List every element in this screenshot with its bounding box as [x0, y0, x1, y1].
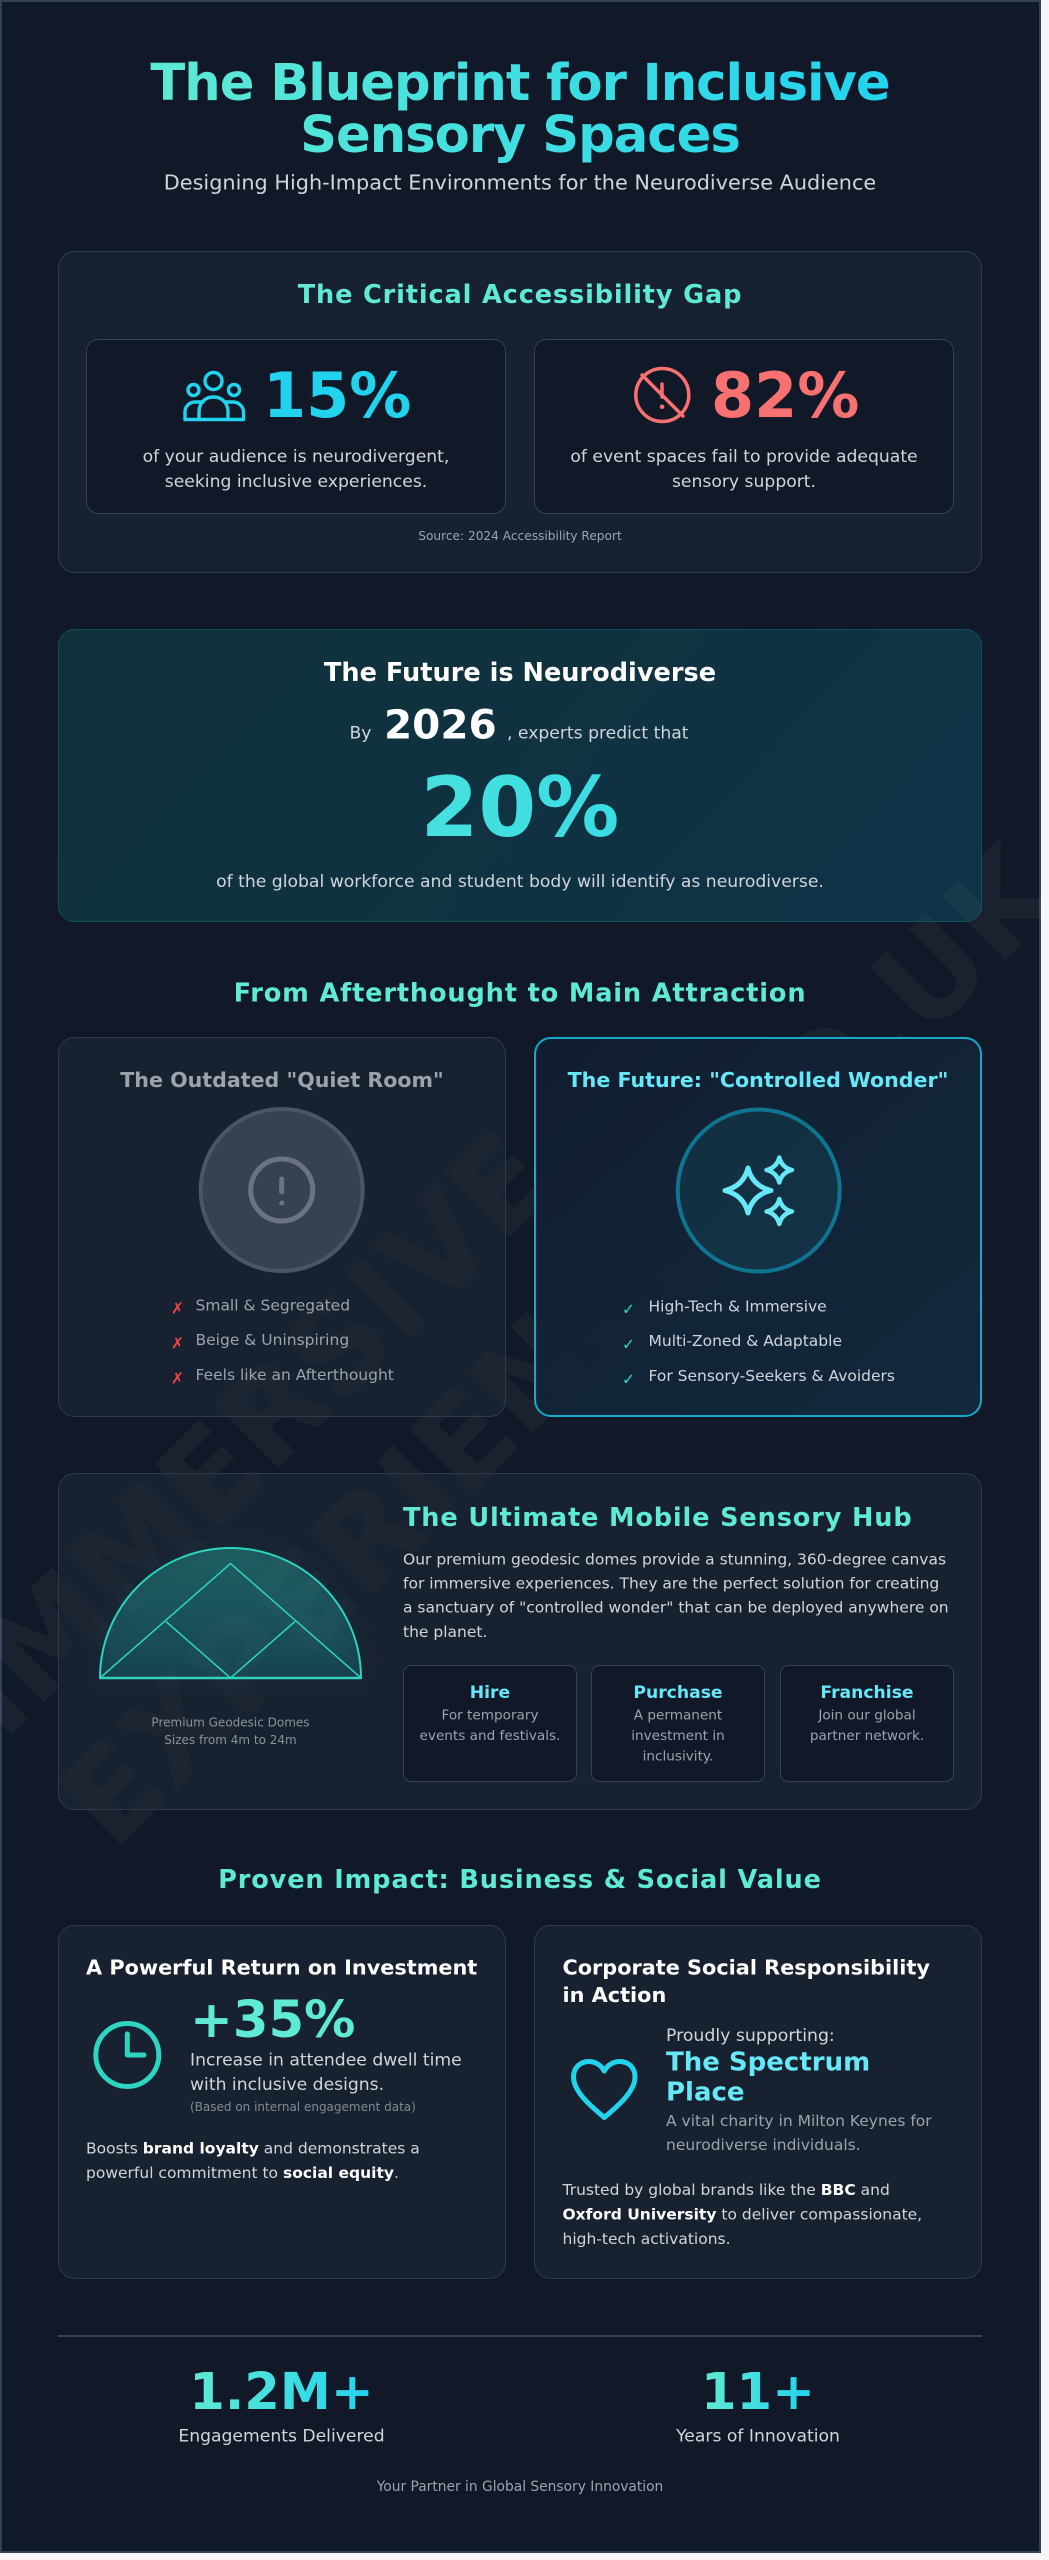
- stat: 15%: 15%: [263, 359, 411, 432]
- heading: The Future: "Controlled Wonder": [568, 1068, 948, 1092]
- card: purchase: Purchase: [633, 1683, 723, 1703]
- card: hire: Hire: [470, 1683, 510, 1703]
- panel: return on investment: [58, 1926, 506, 2278]
- body text: Boosts brand loyalty and demonstrates a: [86, 2140, 420, 2158]
- heading: The Ultimate Mobile Sensory Hub: [403, 1503, 912, 1533]
- heading: The Future is Neurodiverse: [324, 658, 716, 688]
- list: benefits: [622, 1298, 895, 1388]
- icon: heart: [574, 2062, 635, 2118]
- list: drawbacks: ✗: [171, 1370, 184, 1388]
- charity text: Place: [666, 2078, 745, 2108]
- card: purchase: [592, 1666, 764, 1782]
- stat note: (Based on internal engagement data): [190, 2100, 416, 2114]
- list: drawbacks: [171, 1296, 394, 1388]
- card: purchase: inclusivity.: [643, 1748, 713, 1764]
- list: drawbacks: Beige & Uninspiring: [196, 1331, 349, 1349]
- description: [570, 447, 918, 492]
- body text: a sanctuary of "controlled wonder" that can be deployed anywhere on: [403, 1598, 949, 1616]
- stat: engagements delivered: [178, 2362, 385, 2446]
- section heading: afterthought: From Afterthought to Main Attraction: [234, 978, 806, 1008]
- stat description: [190, 2050, 462, 2095]
- icon: no support: [636, 368, 689, 422]
- icon: clock: [96, 2024, 159, 2086]
- card: hire: events and festivals.: [420, 1728, 560, 1744]
- panel: corporate social responsibility: [534, 1926, 982, 2278]
- body text: for immersive experiences. They are the perfect solution for creating: [403, 1574, 939, 1592]
- icon: sparkles: [678, 1110, 840, 1272]
- list: benefits: ✓: [622, 1336, 635, 1354]
- prediction line: 2026: [384, 700, 497, 748]
- card: hire: For temporary: [442, 1708, 538, 1724]
- heading: Corporate Social Responsibility: [562, 1956, 930, 1980]
- caption: dome: Sizes from 4m to 24m: [164, 1733, 297, 1747]
- list: benefits: ✓: [622, 1300, 635, 1318]
- panel: future is neurodiverse: [58, 630, 982, 922]
- heading: [562, 1956, 930, 2007]
- body text: the planet.: [403, 1623, 487, 1641]
- body text: [403, 1550, 949, 1641]
- card: 82 percent: [534, 340, 954, 514]
- heading: A Powerful Return on Investment: [86, 1956, 477, 1980]
- heading: The Outdated "Quiet Room": [120, 1068, 444, 1092]
- source: Source: 2024 Accessibility Report: [418, 529, 622, 543]
- card: purchase: investment in: [631, 1728, 725, 1744]
- stat: years of innovation: Years of Innovation: [675, 2426, 840, 2446]
- body text: [562, 2181, 922, 2248]
- description: seeking inclusive experiences.: [165, 472, 427, 492]
- card: franchise: partner network.: [810, 1728, 924, 1744]
- prediction line: [350, 700, 689, 748]
- stat: engagements delivered: 1.2M+: [189, 2362, 374, 2422]
- list: benefits: High-Tech & Immersive: [648, 1298, 827, 1316]
- panel: controlled wonder: [535, 1038, 981, 1416]
- stat description: with inclusive designs.: [190, 2075, 384, 2095]
- title: [150, 53, 890, 165]
- footer: Your Partner in Global Sensory Innovation: [376, 2479, 663, 2495]
- list: benefits: ✓: [622, 1370, 635, 1388]
- card: franchise: [780, 1666, 954, 1782]
- title: The Blueprint for Inclusive: [150, 53, 890, 113]
- caption: dome: [151, 1716, 310, 1747]
- body text: high-tech activations.: [562, 2230, 731, 2248]
- illustration: geodesic dome: [100, 1548, 361, 1678]
- charity text: Proudly supporting:: [666, 2026, 835, 2046]
- panel: accessibility gap: [58, 252, 982, 572]
- body text: powerful commitment to social equity.: [86, 2164, 399, 2182]
- stat: +35%: +35%: [190, 1990, 355, 2050]
- icon: group of people: [185, 372, 244, 420]
- charity text: A vital charity in Milton Keynes for: [666, 2112, 932, 2130]
- stat description: Increase in attendee dwell time: [190, 2050, 462, 2070]
- heading: accessibility gap: The Critical Accessibility Gap: [298, 280, 742, 310]
- stat: 82%: 82%: [711, 359, 859, 432]
- description: sensory support.: [672, 472, 816, 492]
- list: drawbacks: ✗: [171, 1334, 184, 1352]
- charity text: neurodiverse individuals.: [666, 2136, 861, 2154]
- stat: engagements delivered: Engagements Delivered: [178, 2426, 385, 2446]
- charity text: The Spectrum: [666, 2048, 870, 2078]
- subtitle: Designing High-Impact Environments for the Neurodiverse Audience: [164, 170, 876, 194]
- body text: [86, 2140, 420, 2182]
- list: drawbacks: Small & Segregated: [196, 1296, 350, 1314]
- body text: Trusted by global brands like the BBC and: [562, 2181, 890, 2199]
- stat: 20%: 20%: [421, 759, 619, 856]
- list: benefits: Multi-Zoned & Adaptable: [648, 1332, 842, 1350]
- description: of the global workforce and student body will identify as neurodiverse.: [216, 872, 824, 892]
- icon: warning circle: [201, 1109, 363, 1271]
- stat: years of innovation: 11+: [701, 2362, 815, 2422]
- card: franchise: Franchise: [820, 1683, 914, 1703]
- prediction line: By: [350, 724, 371, 744]
- body text: Oxford University to deliver compassionate,: [562, 2206, 922, 2224]
- stat: years of innovation: [675, 2362, 840, 2446]
- list: benefits: For Sensory-Seekers & Avoiders: [648, 1367, 895, 1385]
- card: hire: [404, 1666, 576, 1782]
- card: 15 percent: [86, 340, 506, 514]
- charity text: [666, 2026, 932, 2154]
- list: drawbacks: ✗: [171, 1300, 184, 1318]
- caption: dome: Premium Geodesic Domes: [151, 1716, 310, 1730]
- card: franchise: Join our global: [817, 1708, 916, 1724]
- prediction line: , experts predict that: [507, 724, 689, 744]
- description: of event spaces fail to provide adequate: [570, 447, 918, 467]
- card: purchase: A permanent: [634, 1708, 722, 1724]
- list: drawbacks: Feels like an Afterthought: [196, 1366, 394, 1384]
- description: of your audience is neurodivergent,: [143, 447, 449, 467]
- panel: mobile sensory hub: [58, 1474, 982, 1810]
- title: Sensory Spaces: [300, 105, 740, 165]
- section heading: proven impact: Proven Impact: Business & Social Value: [218, 1865, 822, 1895]
- heading: in Action: [562, 1983, 666, 2007]
- body text: Our premium geodesic domes provide a stunning, 360-degree canvas: [403, 1550, 946, 1568]
- panel: quiet room: [58, 1038, 506, 1416]
- description: [143, 447, 449, 492]
